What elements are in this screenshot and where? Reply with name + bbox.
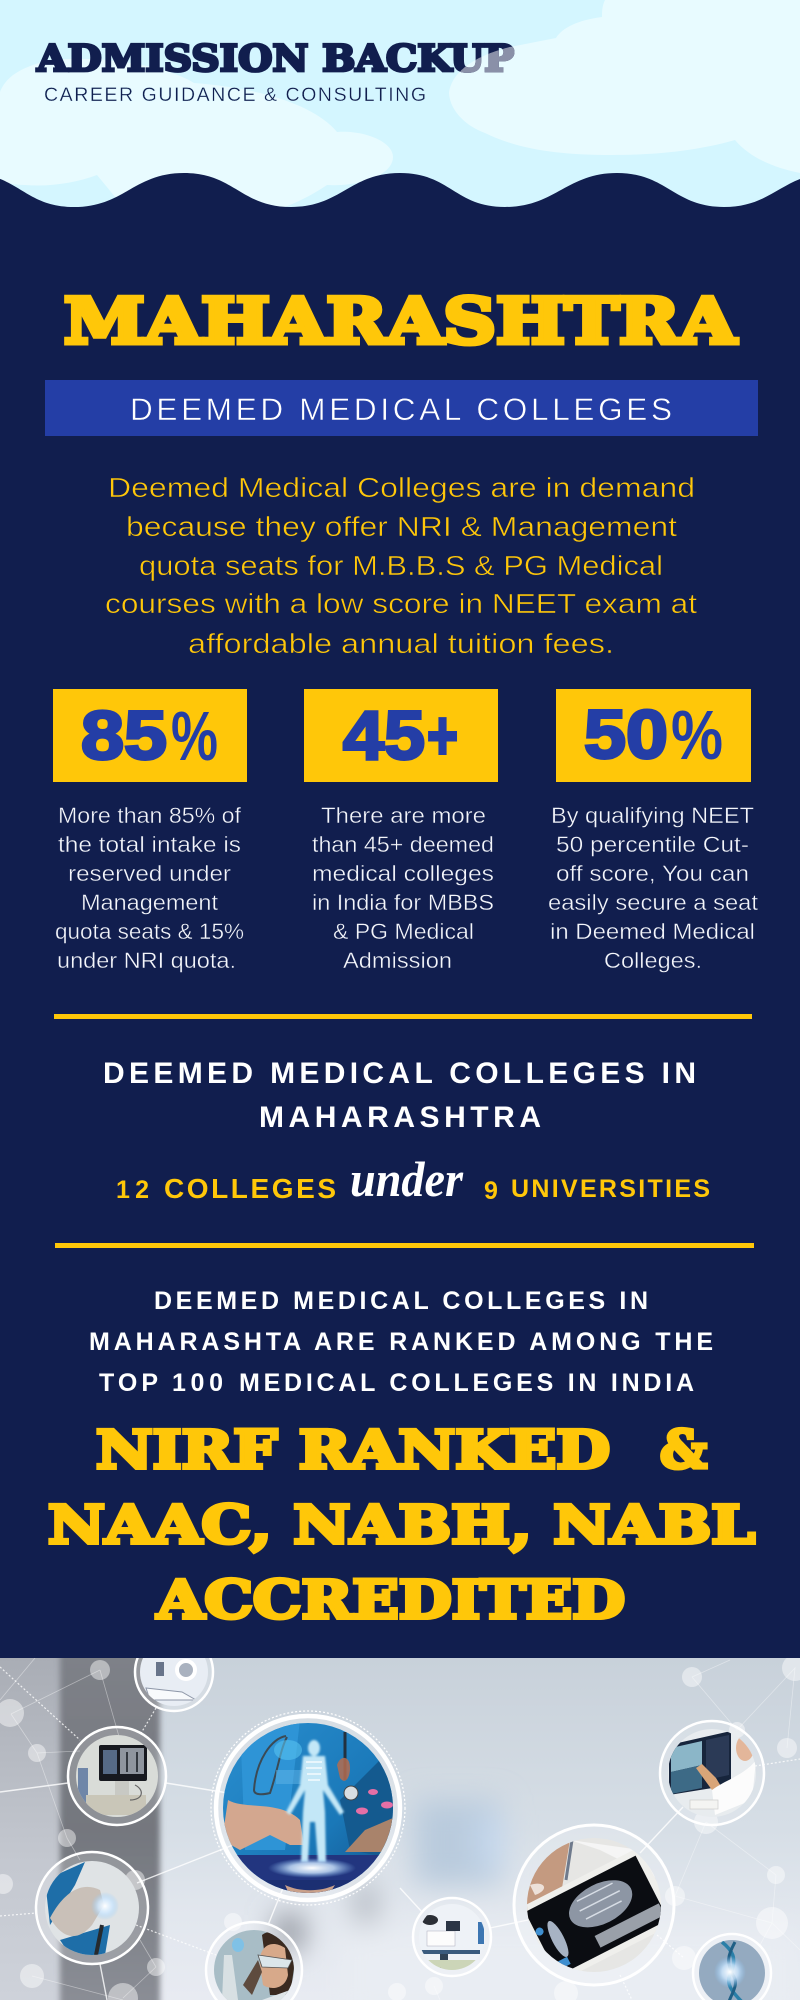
stat text: 50%: 50 percentile Cut-	[556, 832, 749, 857]
circle: doctor at touchscreen	[660, 1721, 764, 1825]
section heading	[103, 1057, 696, 1134]
stat text: 50%: in Deemed Medical	[550, 919, 755, 944]
stat text: 45+: medical colleges	[312, 861, 494, 886]
stat text: 50%: easily secure a seat	[548, 890, 758, 915]
section heading: MAHARASHTRA	[259, 1101, 541, 1134]
circle: MRI scanner	[134, 1658, 214, 1712]
stat text: 45+: in India for MBBS	[312, 890, 494, 915]
circle: holographic human body	[211, 1711, 405, 1905]
accreditation headline: &	[660, 1420, 707, 1481]
colleges and universities count: UNIVERSITIES	[511, 1175, 710, 1203]
panel: sky header with clouds	[0, 0, 800, 230]
stat text: 85%: under NRI quota.	[57, 948, 236, 973]
panel: navy body with wavy top edge	[0, 173, 800, 1660]
stat card: 45+: 45	[343, 697, 425, 774]
cloud: right	[449, 0, 800, 173]
ranking statement: TOP	[99, 1369, 158, 1397]
ranking statement: 100	[172, 1369, 223, 1397]
stat text: 85%: quota seats & 15%	[55, 919, 244, 944]
stat text: 85%: Management	[81, 890, 218, 915]
stat card: 85%: 85	[81, 697, 167, 774]
network lines	[0, 1658, 800, 2000]
photo: medical technology network	[0, 1633, 800, 2000]
stat text: 45+: There are more	[321, 803, 486, 828]
circle: scientist with goggles	[206, 1922, 302, 2000]
circle: operating room	[413, 1898, 491, 1976]
accreditation headline: NIRF RANKED	[96, 1420, 610, 1481]
stat text: 45+: Admission	[343, 948, 452, 973]
ranking statement: MEDICAL COLLEGES IN INDIA	[239, 1369, 694, 1397]
colleges and universities count: 9	[484, 1177, 498, 1205]
stat card: 50%: 50	[584, 696, 668, 773]
stat text: 45+: & PG Medical	[333, 919, 474, 944]
stat text: 45+	[312, 803, 494, 973]
stat text: 85%: the total intake is	[58, 832, 241, 857]
section heading: DEEMED MEDICAL COLLEGES IN	[103, 1057, 696, 1090]
intro paragraph: because they offer NRI & Management	[126, 511, 677, 542]
ranking statement	[89, 1287, 713, 1397]
stat text: 85%: More than 85% of	[58, 803, 242, 828]
circle: chest x-ray monitor	[68, 1727, 166, 1825]
intro paragraph: Deemed Medical Colleges are in demand	[108, 472, 695, 503]
stat text: 50%: By qualifying NEET	[551, 803, 754, 828]
stat card: 45+	[304, 689, 498, 782]
stat text: 50%: Colleges.	[604, 948, 702, 973]
accreditation headline: NAAC, NABH, NABL	[48, 1495, 755, 1556]
stat text: 85%: reserved under	[68, 861, 231, 886]
subtitle banner: DEEMED MEDICAL COLLEGES	[130, 391, 672, 427]
stat card: 50%: %	[671, 696, 723, 774]
logo subtitle: CAREER GUIDANCE & CONSULTING	[44, 84, 426, 106]
ranking statement: DEEMED MEDICAL COLLEGES IN	[154, 1287, 648, 1315]
cloud: left	[0, 59, 393, 215]
stat card: 50%	[556, 689, 751, 782]
intro paragraph: affordable annual tuition fees.	[188, 628, 614, 659]
logo title	[35, 42, 514, 73]
stat card: 45+: +	[427, 697, 458, 774]
intro paragraph: quota seats for M.B.B.S & PG Medical	[139, 550, 663, 581]
logo title: ADMISSION BACKUP	[36, 38, 514, 80]
colleges and universities count: under	[350, 1151, 464, 1207]
network nodes	[0, 1655, 800, 2000]
main title: MAHARASHTRA	[64, 284, 737, 358]
colleges and universities count: 12	[116, 1176, 149, 1204]
stat text: 50%	[548, 803, 758, 973]
stat text: 85%	[55, 803, 244, 973]
ranking statement: MAHARASHTA ARE RANKED AMONG THE	[89, 1328, 713, 1356]
logo title: ADMISSION BACKUP	[36, 38, 514, 80]
colleges and universities count	[116, 1151, 710, 1207]
circle: DNA helix	[693, 1934, 771, 2000]
circle: stethoscope hand	[36, 1852, 148, 1964]
stat card: 85%: %	[171, 697, 218, 775]
intro paragraph: courses with a low score in NEET exam at	[105, 588, 697, 619]
subtitle banner	[45, 380, 758, 436]
stat text: 45+: than 45+ deemed	[312, 832, 494, 857]
stat text: 50%: off score, You can	[556, 861, 749, 886]
accreditation headline	[48, 1420, 755, 1631]
intro paragraph	[105, 472, 697, 659]
stat card: 85%	[53, 689, 247, 782]
colleges and universities count: COLLEGES	[164, 1173, 336, 1204]
accreditation headline: ACCREDITED	[156, 1570, 625, 1631]
circle: tablet with x-ray	[514, 1825, 677, 1985]
